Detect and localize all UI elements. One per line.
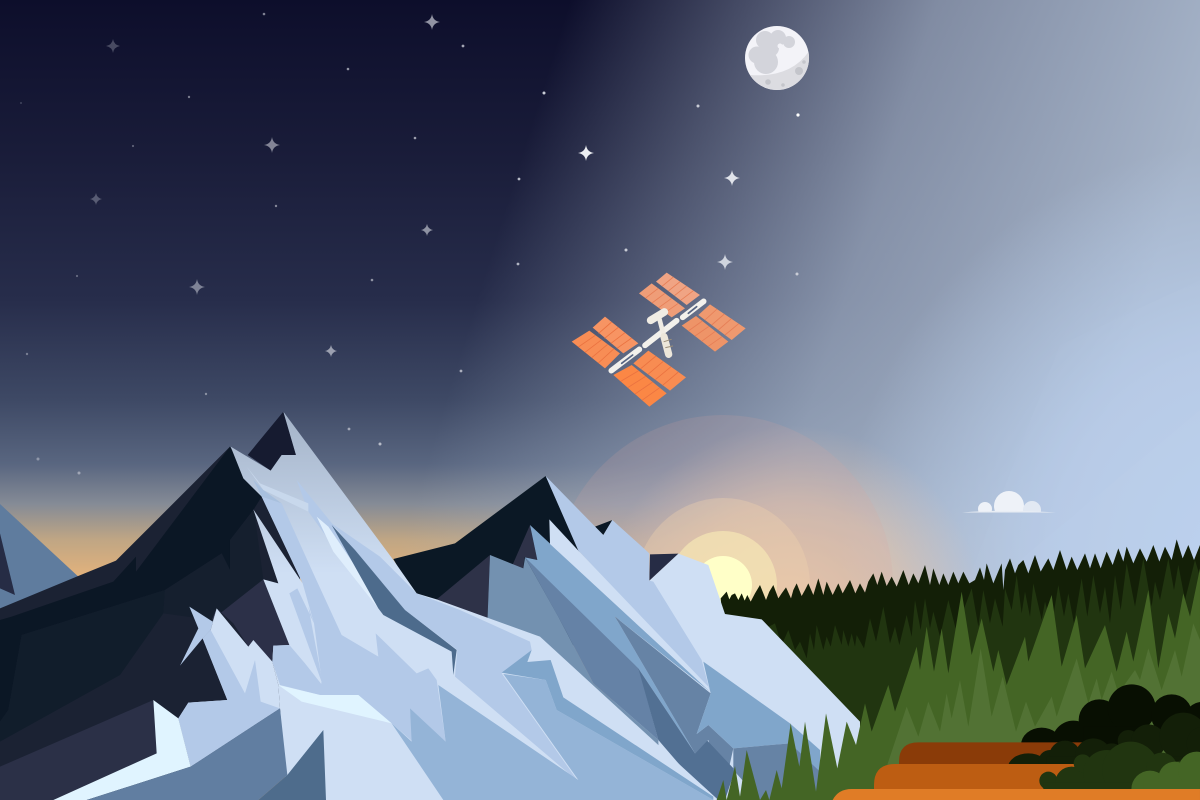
dark green shrubs <box>1008 713 1200 783</box>
ice spikes <box>180 607 217 666</box>
slate wedge <box>332 525 457 675</box>
terrace: burnt orange <box>874 764 1110 789</box>
mid green shrubs <box>1039 742 1200 800</box>
lower ice band <box>392 674 713 800</box>
maria <box>748 30 795 74</box>
shrubs and terraces <box>833 684 1200 800</box>
bright ice faces <box>53 700 191 800</box>
blue shaded snow bands <box>262 497 446 742</box>
black shrubs <box>1021 684 1200 766</box>
truss <box>611 301 704 371</box>
right snow slope <box>613 554 860 800</box>
light green shrubs <box>1131 752 1200 800</box>
stars <box>20 13 800 474</box>
moon <box>745 26 809 90</box>
dark back face <box>393 476 580 647</box>
solar panels: lower left <box>572 317 686 407</box>
dark back body <box>0 447 300 800</box>
forest: lightest trees <box>887 623 1200 800</box>
steel blue faces <box>487 555 660 800</box>
cloud <box>963 491 1054 512</box>
shaded crescent <box>750 52 809 90</box>
snow mass with summit shading <box>231 412 718 800</box>
center mountain <box>393 476 860 800</box>
space station <box>572 273 746 407</box>
sun and glow rings <box>553 415 893 755</box>
forest: foreground trees <box>717 568 1200 800</box>
ridge snow face <box>546 476 710 692</box>
forest: far dark tree line <box>721 539 1200 663</box>
main mountain <box>0 412 718 800</box>
terrace: dark rust <box>899 742 1093 764</box>
far left peak <box>0 504 78 613</box>
dark summit cap <box>248 412 296 471</box>
solar panels: upper right <box>639 273 746 352</box>
upper right band above wedge <box>332 523 578 782</box>
modules <box>651 312 673 354</box>
grey rock faces <box>437 525 537 623</box>
terrace: bright orange <box>833 789 1200 800</box>
forest: mid tree layer <box>750 558 1200 800</box>
